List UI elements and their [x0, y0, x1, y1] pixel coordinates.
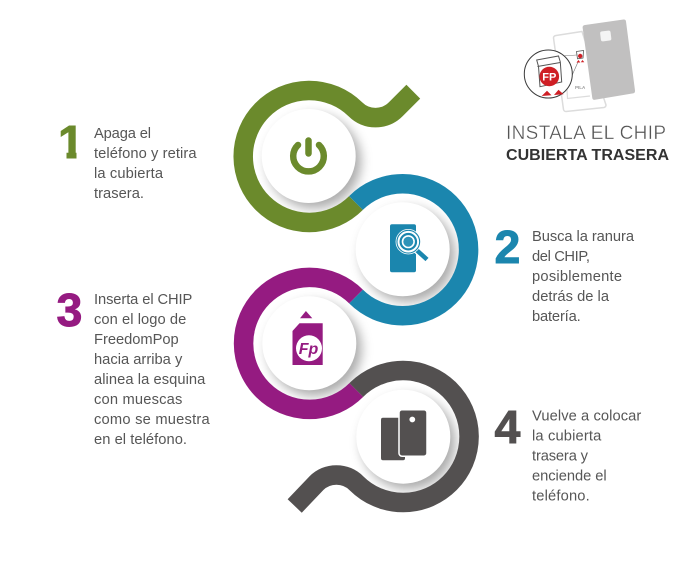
step 4 text: la cubierta	[532, 428, 602, 444]
step 1 number: 1	[58, 116, 84, 168]
disc: step 2	[356, 202, 450, 296]
magnified chip circle: FP	[542, 72, 556, 84]
step 4 text: trasera y	[532, 448, 589, 464]
step 3 text: FreedomPop	[94, 332, 179, 348]
phone outline	[554, 32, 606, 112]
icon: phone and back cover	[381, 410, 427, 460]
step 3 text: Inserta el CHIP	[94, 292, 193, 308]
title: INSTALA EL CHIP	[506, 123, 666, 144]
disc shadows	[267, 114, 456, 490]
step 2 text: detrás de la	[532, 289, 610, 305]
step 3 number: 3	[56, 284, 82, 336]
step 3 text: hacia arriba y	[94, 352, 183, 368]
step 1 text: la cubierta	[94, 166, 164, 182]
icon: phone with magnifier	[390, 224, 427, 272]
step 2 text: batería.	[532, 309, 581, 325]
title	[506, 123, 669, 164]
step 2 text: Busca la ranura	[532, 229, 635, 245]
step 4 text: Vuelve a colocar	[532, 408, 641, 424]
disc: step 3	[262, 296, 356, 390]
ribbon: purple segment	[244, 277, 356, 409]
step 3 text: con el logo de	[94, 312, 186, 328]
step 3 text: como se muestra	[94, 412, 211, 428]
step 1 text: trasera.	[94, 186, 144, 202]
small chip	[576, 50, 584, 62]
step 1 text: teléfono y retira	[94, 146, 197, 162]
step 3 text	[94, 292, 211, 448]
ribbon: blue segment	[356, 184, 469, 316]
step 2 text: posiblemente	[532, 269, 622, 285]
ribbon: green segment	[243, 90, 413, 222]
step 3 text: alinea la esquina	[94, 372, 206, 388]
disc: step 1	[262, 109, 356, 203]
magnifier callout lines	[562, 55, 578, 80]
icon: power	[293, 140, 324, 171]
step 4 text: teléfono.	[532, 488, 590, 504]
step 3 text: con muescas	[94, 392, 182, 408]
disc: step 4	[356, 390, 450, 484]
step 2 text	[532, 229, 635, 325]
icon: SIM chip with FP logo: Fp	[299, 341, 318, 358]
ribbon: dark gray segment	[295, 371, 469, 506]
title: CUBIERTA TRASERA	[506, 147, 669, 164]
step 1 text	[94, 126, 197, 202]
step 2 text: del CHIP,	[532, 249, 590, 265]
step 4 text	[532, 408, 641, 504]
step 1 text: Apaga el	[94, 126, 151, 142]
battery label: PILA	[575, 85, 586, 90]
step 4 text: enciende el	[532, 468, 607, 484]
step 3 text: en el teléfono.	[94, 432, 187, 448]
icon: SIM chip with FP logo	[292, 311, 323, 365]
step 2 number: 2	[494, 221, 520, 273]
step 4 number: 4	[494, 401, 520, 453]
back cover	[583, 19, 635, 100]
back cover camera hole	[600, 30, 612, 42]
icon: phone and back cover illustration	[524, 19, 635, 111]
